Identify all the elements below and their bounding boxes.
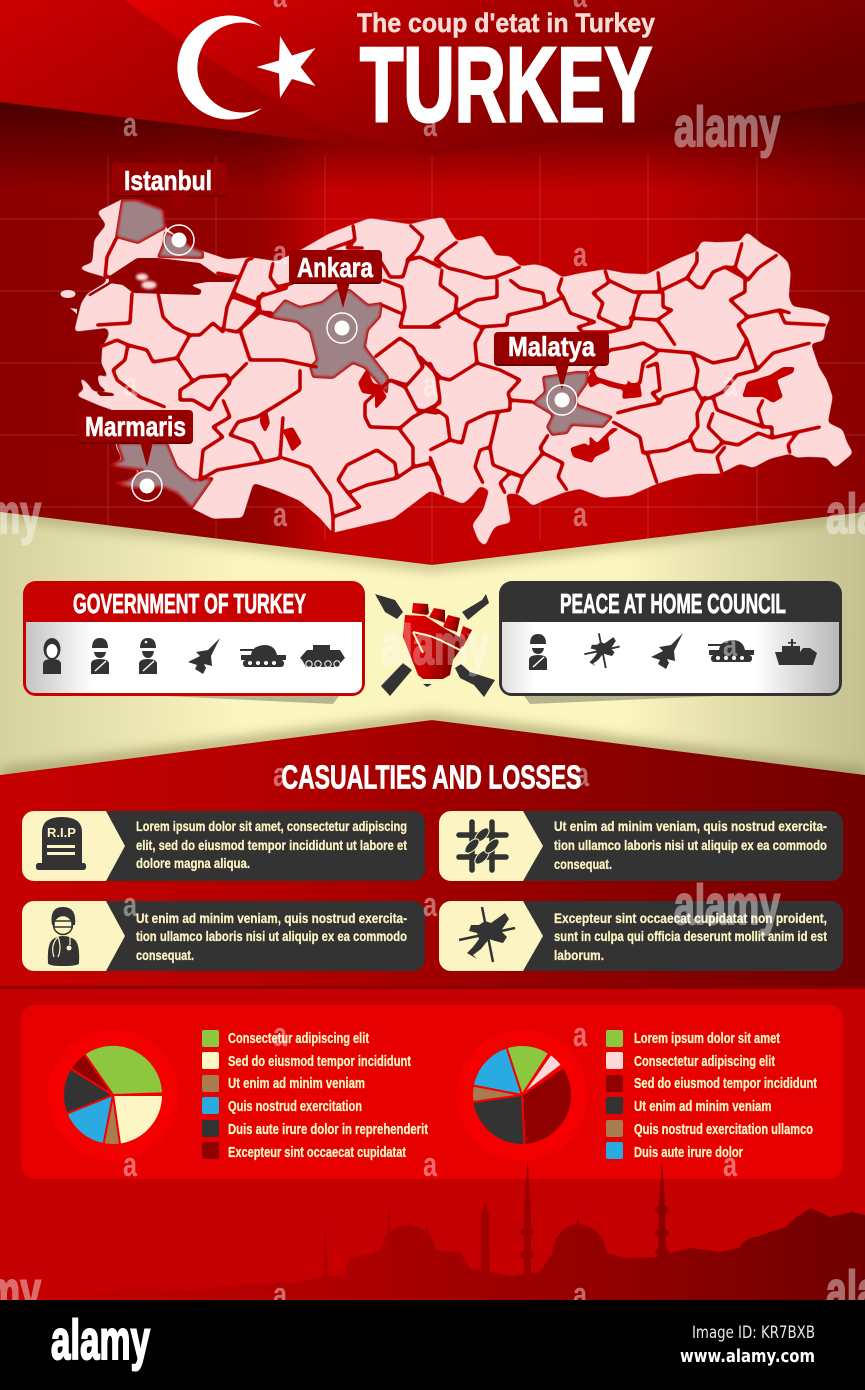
pie chart 1	[48, 1030, 178, 1160]
legend 1	[202, 1030, 428, 1161]
icon: tombstone: R.I.P	[47, 826, 76, 840]
text: dolore magna aliqua.	[136, 856, 250, 871]
watermarks: a	[123, 1146, 138, 1184]
watermarks: a	[573, 1276, 588, 1314]
watermarks: a	[273, 1276, 288, 1314]
icon: soldier	[529, 634, 547, 670]
text: Ut enim ad minim veniam, quis nostrud exercita-	[554, 819, 827, 834]
pin: Malatya	[494, 331, 609, 415]
legend 2: Consectetur adipiscing elit	[634, 1054, 775, 1070]
watermarks: a	[723, 366, 738, 404]
icon: doctor	[48, 907, 79, 966]
icon: woman	[43, 638, 61, 674]
text: consequat.	[136, 948, 194, 963]
watermarks: a	[123, 886, 138, 924]
country outline	[75, 200, 852, 545]
legend 1: Consectetur adipiscing elit	[228, 1031, 369, 1047]
istanbul skyline silhouette	[60, 1160, 865, 1300]
watermarks: a	[723, 626, 738, 664]
icon: armed soldier	[139, 638, 157, 674]
watermarks: a	[573, 236, 588, 274]
watermarks: a	[423, 106, 438, 144]
watermarks: alamy: alamy	[674, 873, 780, 936]
heading: casualties and losses: CASUALTIES AND LOSSES	[282, 758, 582, 796]
card: prisoners	[439, 811, 843, 881]
panel: peace at home council	[499, 581, 842, 704]
watermarks: a	[123, 106, 138, 144]
legend 1: Ut enim ad minim veniam	[228, 1076, 365, 1092]
website: www.alamy.com	[680, 1347, 815, 1367]
card: aircraft losses	[439, 901, 843, 971]
legend 2: Quis nostrud exercitation ullamco	[634, 1122, 813, 1138]
footer bar	[0, 1300, 865, 1390]
watermarks: a	[273, 756, 288, 794]
watermarks: a	[273, 234, 288, 272]
heading: GOVERNMENT OF TURKEY	[73, 588, 306, 619]
watermarks: a	[423, 886, 438, 924]
highlighted provinces	[110, 200, 612, 508]
pin: Ankara: Ankara	[297, 252, 373, 283]
text: Lorem ipsum dolor sit amet, consectetur adipiscing	[136, 819, 407, 834]
watermarks: alamy: alamy	[381, 613, 489, 676]
legend 1: Sed do eiusmod tempor incididunt	[228, 1054, 411, 1070]
pin: Istanbul	[112, 163, 227, 255]
icon: tombstone	[36, 817, 86, 870]
lakes	[260, 367, 795, 463]
island	[60, 290, 76, 298]
alamy logo: alamy	[51, 1308, 150, 1371]
watermarks: a	[423, 1146, 438, 1184]
icon: warship	[775, 639, 817, 665]
icon: tank	[708, 640, 754, 662]
legend 2: Ut enim ad minim veniam	[634, 1099, 772, 1115]
pin: Istanbul: Istanbul	[124, 165, 212, 196]
map section background	[0, 100, 865, 570]
card: deaths	[22, 811, 425, 881]
text: consequat.	[554, 857, 612, 872]
header banner	[0, 0, 865, 190]
text: elit, sed do eiusmod tempor incididunt ut labore et	[136, 838, 407, 853]
text: laborum.	[554, 948, 604, 963]
text: Excepteur sint occaecat cupidatat non proident,	[554, 911, 827, 926]
map of Turkey	[60, 200, 852, 545]
title: TURKEY	[360, 26, 652, 144]
legend 2	[606, 1030, 817, 1161]
icon: raised fist with weapons	[375, 594, 495, 697]
icon: crescent and star	[177, 16, 316, 120]
island	[70, 308, 77, 314]
sea of marmara	[88, 258, 238, 396]
watermarks: a	[723, 1146, 738, 1184]
watermarks: a	[573, 496, 588, 534]
icon: soldier	[91, 638, 109, 674]
image id: Image ID: KR7BXB	[692, 1323, 815, 1343]
text: tion ullamco laboris nisi ut aliquip ex ea commodo	[136, 929, 407, 944]
icon: fighter jet	[651, 633, 683, 669]
icon: fighter jet	[188, 638, 220, 674]
text	[554, 911, 827, 963]
legend 1: Excepteur sint occaecat cupidatat	[228, 1145, 406, 1161]
text	[136, 911, 407, 963]
text: Ut enim ad minim veniam, quis nostrud exercita-	[136, 911, 407, 926]
watermarks: a	[123, 366, 138, 404]
icon: helicopter	[459, 907, 515, 962]
cream band	[0, 512, 865, 775]
pin: Marmaris	[78, 410, 193, 501]
watermarks: alamy: alamy	[674, 95, 780, 158]
lower red section background	[0, 700, 865, 1300]
pin: Ankara	[289, 250, 382, 343]
watermarks: a	[573, 1016, 588, 1054]
icon: helicopter	[584, 633, 620, 668]
text	[136, 819, 407, 871]
legend 1: Duis aute irure dolor in reprehenderit	[228, 1122, 428, 1138]
panel: charts	[21, 1005, 843, 1179]
icon: tank	[240, 645, 286, 667]
watermarks: a	[423, 366, 438, 404]
watermarks: a	[273, 1016, 288, 1054]
icon: armored vehicle	[300, 645, 345, 667]
pin: Marmaris: Marmaris	[85, 411, 186, 442]
watermarks: a	[575, 756, 590, 794]
watermarks	[123, 0, 738, 1314]
legend 2: Duis aute irure dolor	[634, 1145, 743, 1161]
watermarks: a	[273, 496, 288, 534]
pin: Malatya: Malatya	[508, 331, 595, 362]
legend 2: Lorem ipsum dolor sit amet	[634, 1031, 780, 1047]
card: wounded	[22, 901, 425, 971]
legend 1: Quis nostrud exercitation	[228, 1099, 362, 1115]
icon: barbed wire	[459, 822, 506, 870]
pie chart 2	[456, 1030, 588, 1160]
text	[554, 819, 827, 872]
panel: government of Turkey	[23, 581, 365, 704]
province borders	[97, 225, 825, 532]
watermarks: a	[123, 626, 138, 664]
subtitle: The coup d'etat in Turkey	[357, 8, 655, 38]
